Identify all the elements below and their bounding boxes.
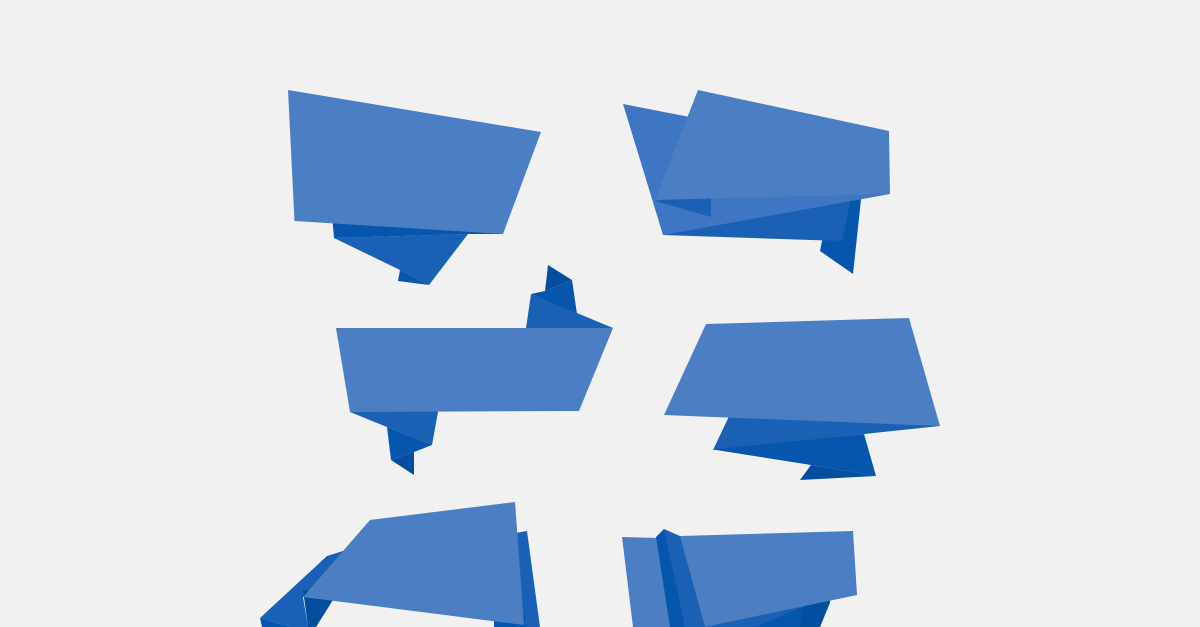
banner: bottom right <box>622 529 857 627</box>
banner: top right <box>623 90 890 274</box>
banner: bottom left <box>260 502 540 627</box>
banner: top left <box>288 90 541 285</box>
banner: middle left <box>336 265 613 475</box>
banner: middle right <box>664 318 940 480</box>
